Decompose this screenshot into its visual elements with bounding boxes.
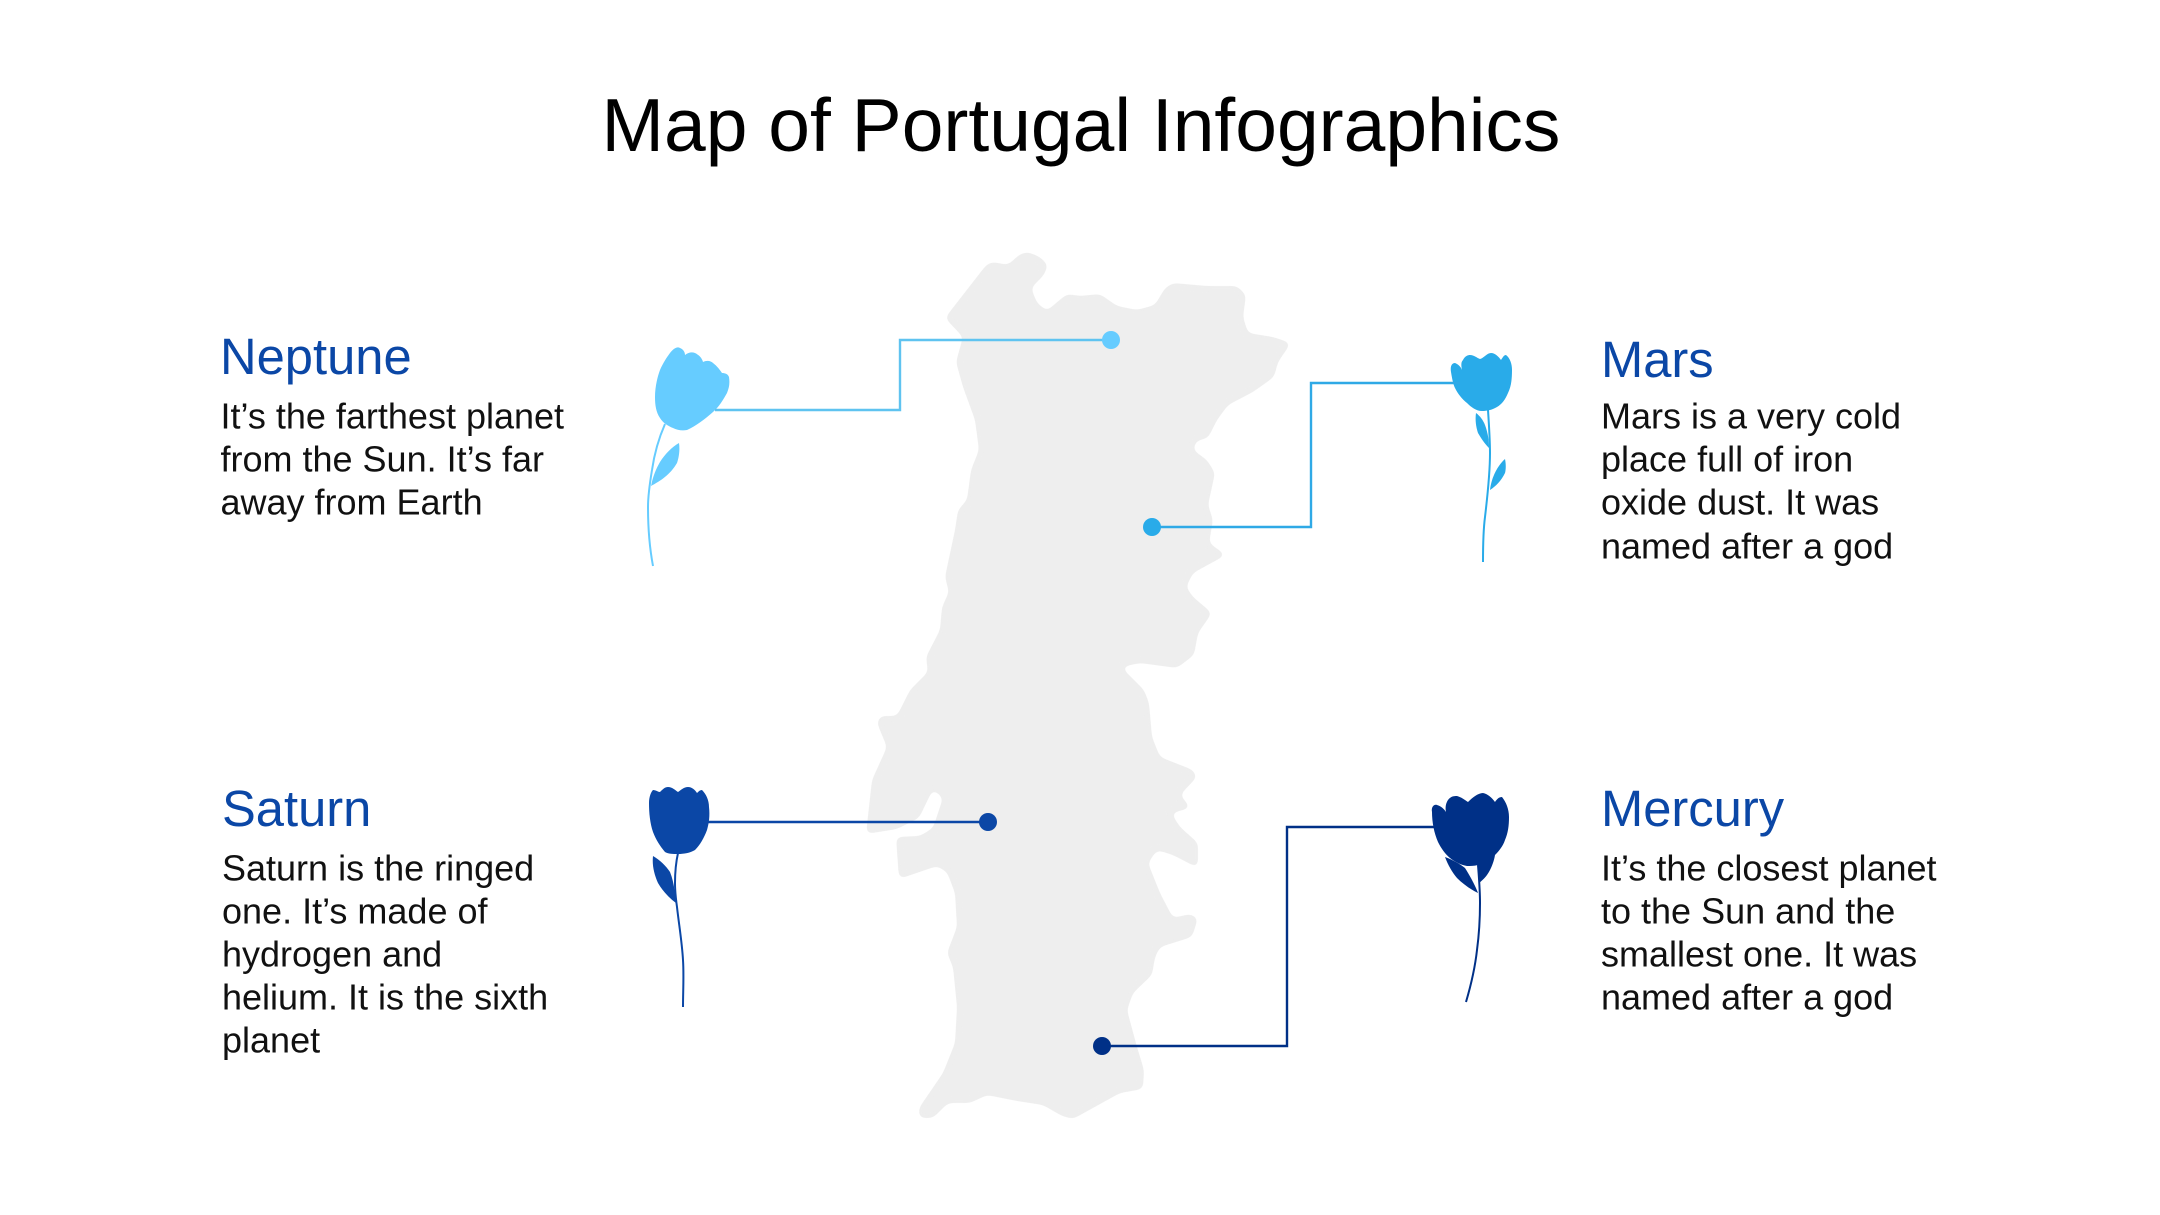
icon: Saturn flower xyxy=(649,787,709,1007)
heading: Neptune: Neptune xyxy=(220,328,412,385)
panel: Saturn xyxy=(222,780,548,1061)
heading: Mars: Mars xyxy=(1601,331,1714,388)
text: Neptune description xyxy=(220,395,564,522)
text: Saturn description: helium. It is the sixth xyxy=(222,976,548,1017)
text: Mars description: place full of iron xyxy=(1601,438,1853,479)
text: Neptune description: from the Sun. It’s far xyxy=(220,438,544,479)
map of Portugal xyxy=(866,252,1291,1119)
connector: Saturn xyxy=(700,813,997,831)
text: Saturn description xyxy=(222,847,548,1061)
connector: Mars xyxy=(1143,383,1460,536)
text: Saturn description: hydrogen and xyxy=(222,933,442,974)
heading: Mercury: Mercury xyxy=(1601,780,1785,837)
text: Mars description: oxide dust. It was xyxy=(1601,481,1879,522)
text: Mars description: named after a god xyxy=(1601,525,1893,566)
panel: Mercury xyxy=(1601,780,1937,1017)
title: Map of Portugal Infographics xyxy=(602,83,1560,167)
panel: Mars xyxy=(1601,331,1901,566)
icon: Mercury flower xyxy=(1432,793,1509,1002)
text: Neptune description: It’s the farthest planet xyxy=(220,395,564,436)
text: Mercury description: named after a god xyxy=(1601,976,1893,1017)
text: Mercury description: to the Sun and the xyxy=(1601,890,1895,931)
text: Mars description: Mars is a very cold xyxy=(1601,395,1901,436)
connector: Mercury xyxy=(1093,827,1440,1055)
panel: Neptune xyxy=(220,328,564,522)
text: Mercury description: It’s the closest planet xyxy=(1601,847,1937,888)
heading: Saturn: Saturn xyxy=(222,780,371,837)
text: Saturn description: one. It’s made of xyxy=(222,890,488,931)
text: Mercury description xyxy=(1601,847,1937,1017)
text: Mars description xyxy=(1601,395,1901,566)
text: Saturn description: Saturn is the ringed xyxy=(222,847,534,888)
connector: Neptune xyxy=(715,331,1120,410)
text: Mercury description: smallest one. It was xyxy=(1601,933,1917,974)
icon: Mars flower xyxy=(1451,353,1512,562)
text: Saturn description: planet xyxy=(222,1020,320,1061)
icon: Neptune flower xyxy=(648,347,729,566)
text: Neptune description: away from Earth xyxy=(220,481,483,522)
